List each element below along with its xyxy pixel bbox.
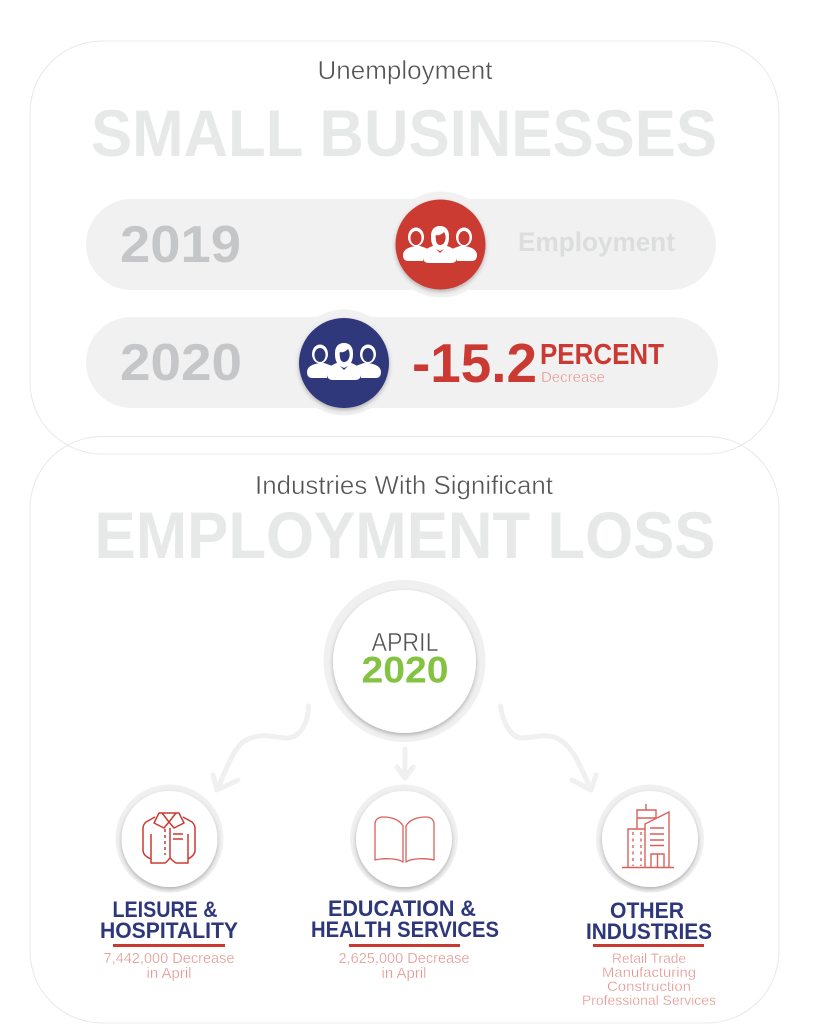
title: other industries: OTHER [610, 898, 684, 923]
panel: employment loss [30, 436, 779, 1023]
stat label: decrease: Decrease [541, 369, 605, 386]
column: other industries [582, 784, 716, 1008]
icon: book [375, 817, 434, 862]
stat label: percent: PERCENT [540, 339, 664, 371]
panel: unemployment small businesses [30, 41, 779, 454]
detail: other industries list: Professional Services [582, 992, 716, 1008]
detail: other industries list: Retail Trade [612, 950, 686, 966]
detail: education figures [338, 951, 470, 982]
heading: small businesses: SMALL BUSINESSES [91, 96, 717, 170]
year: 2019: 2019 [120, 216, 241, 274]
detail: leisure figures: 7,442,000 Decrease [104, 951, 234, 967]
stat: -15.2: -15.2 [412, 332, 537, 394]
year: 2020: 2020 [120, 334, 242, 392]
title: education and health services: EDUCATION & [328, 896, 476, 921]
subtitle: industries: Industries With Significant [255, 470, 554, 500]
title: education and health services [311, 896, 499, 942]
column: education and health services [311, 784, 499, 982]
label: april: APRIL [372, 627, 438, 657]
row: 2020 decrease [86, 310, 718, 416]
detail: other industries list: Manufacturing [602, 964, 696, 980]
badge: april 2020 [324, 580, 486, 742]
arrow: center [397, 749, 413, 778]
detail: other industries list [582, 950, 716, 1008]
column: leisure and hospitality [100, 784, 238, 982]
row: 2019 employment [86, 192, 716, 298]
subtitle: unemployment: Unemployment [318, 55, 493, 85]
title: other industries: INDUSTRIES [586, 919, 712, 944]
label: employment: Employment [518, 227, 675, 257]
detail: education figures: 2,625,000 Decrease [338, 951, 470, 967]
icon: employees red [396, 200, 486, 290]
detail: leisure figures: in April [146, 966, 192, 982]
title: other industries [586, 898, 712, 944]
arrow: left [213, 706, 308, 790]
detail: other industries list: Construction [607, 978, 691, 994]
title: leisure and hospitality [100, 897, 238, 943]
title: leisure and hospitality: LEISURE & [112, 897, 218, 922]
title: leisure and hospitality: HOSPITALITY [100, 918, 238, 943]
detail: leisure figures [104, 951, 234, 982]
label: 2020: 2020 [362, 650, 448, 690]
heading: employment loss: EMPLOYMENT LOSS [94, 498, 716, 572]
detail: education figures: in April [382, 966, 426, 982]
icon: shirt [143, 813, 195, 863]
icon: employees blue [299, 318, 389, 408]
icon: buildings [622, 804, 674, 868]
title: education and health services: HEALTH SERVICES [311, 917, 499, 942]
arrow: right [500, 706, 596, 790]
